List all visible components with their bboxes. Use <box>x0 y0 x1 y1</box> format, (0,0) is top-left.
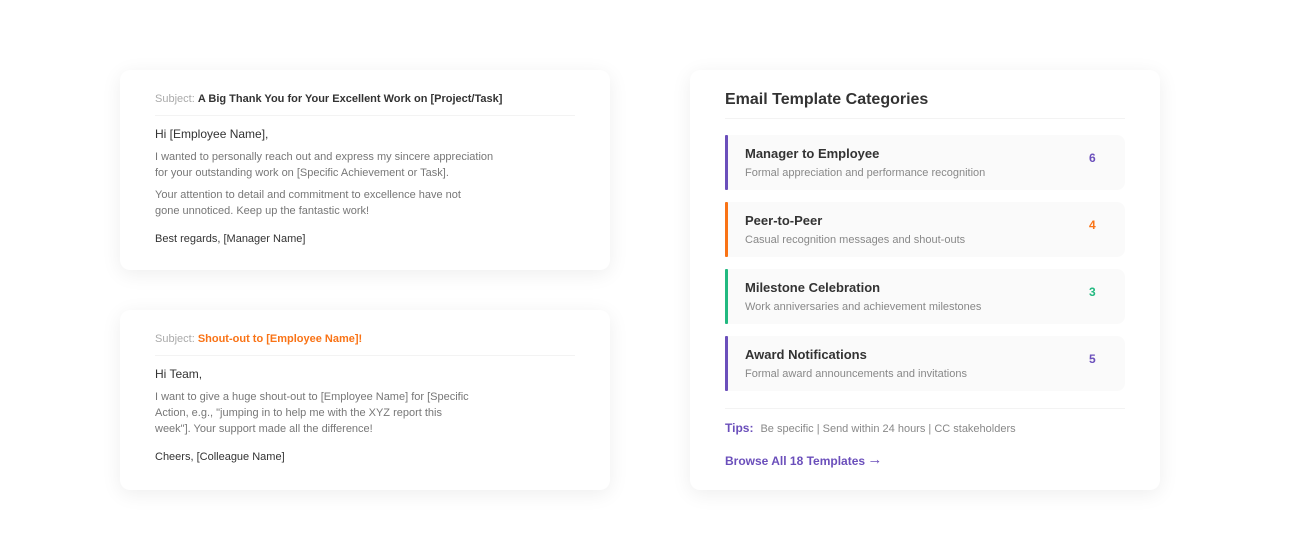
template count: 6 <box>1089 151 1096 165</box>
body paragraph: week"]. Your support made all the difference! <box>155 423 373 435</box>
template count: 4 <box>1089 218 1096 232</box>
email subject: Subject: Shout-out to [Employee Name]! <box>155 333 362 345</box>
greeting: Hi Team, <box>155 367 202 381</box>
greeting: Hi [Employee Name], <box>155 127 268 141</box>
template count: 5 <box>1089 352 1096 366</box>
category: award notifications <box>725 336 1125 391</box>
category: peer-to-peer <box>725 202 1125 257</box>
panel: email template categories <box>690 70 1160 490</box>
panel: formal thank-you email <box>120 70 610 270</box>
category name: Milestone Celebration <box>745 280 880 295</box>
category: manager to employee <box>725 135 1125 190</box>
body paragraph: Action, e.g., "jumping in to help me with the XYZ report this <box>155 407 442 419</box>
sign-off: Best regards, [Manager Name] <box>155 233 305 245</box>
template count: 3 <box>1089 285 1096 299</box>
email subject: Subject: A Big Thank You for Your Excellent Work on [Project/Task] <box>155 93 502 105</box>
body paragraph 1 <box>155 151 493 179</box>
category name: Manager to Employee <box>745 146 879 161</box>
sign-off: Cheers, [Colleague Name] <box>155 451 285 463</box>
body paragraph 1: for your outstanding work on [Specific Achievement or Task]. <box>155 167 449 179</box>
body paragraph <box>155 391 469 435</box>
category description: Formal appreciation and performance recognition <box>745 167 985 179</box>
body paragraph: I want to give a huge shout-out to [Employee Name] for [Specific <box>155 391 469 403</box>
body paragraph 2 <box>155 189 461 217</box>
tips: Tips: Be specific | Send within 24 hours | CC stakeholders <box>725 421 1016 435</box>
category name: Award Notifications <box>745 347 867 362</box>
body paragraph 2: Your attention to detail and commitment to excellence have not <box>155 189 461 201</box>
panel: shout-out email <box>120 310 610 490</box>
heading: Email Template Categories <box>725 91 928 108</box>
body paragraph 1: I wanted to personally reach out and express my sincere appreciation <box>155 151 493 163</box>
body paragraph 2: gone unnoticed. Keep up the fantastic work! <box>155 205 369 217</box>
link: browse all templates: Browse All 18 Templates → <box>725 451 882 468</box>
category description: Casual recognition messages and shout-outs <box>745 234 965 246</box>
category: milestone celebration <box>725 269 1125 324</box>
category description: Work anniversaries and achievement milestones <box>745 301 981 313</box>
category description: Formal award announcements and invitations <box>745 368 967 380</box>
category name: Peer-to-Peer <box>745 213 822 228</box>
